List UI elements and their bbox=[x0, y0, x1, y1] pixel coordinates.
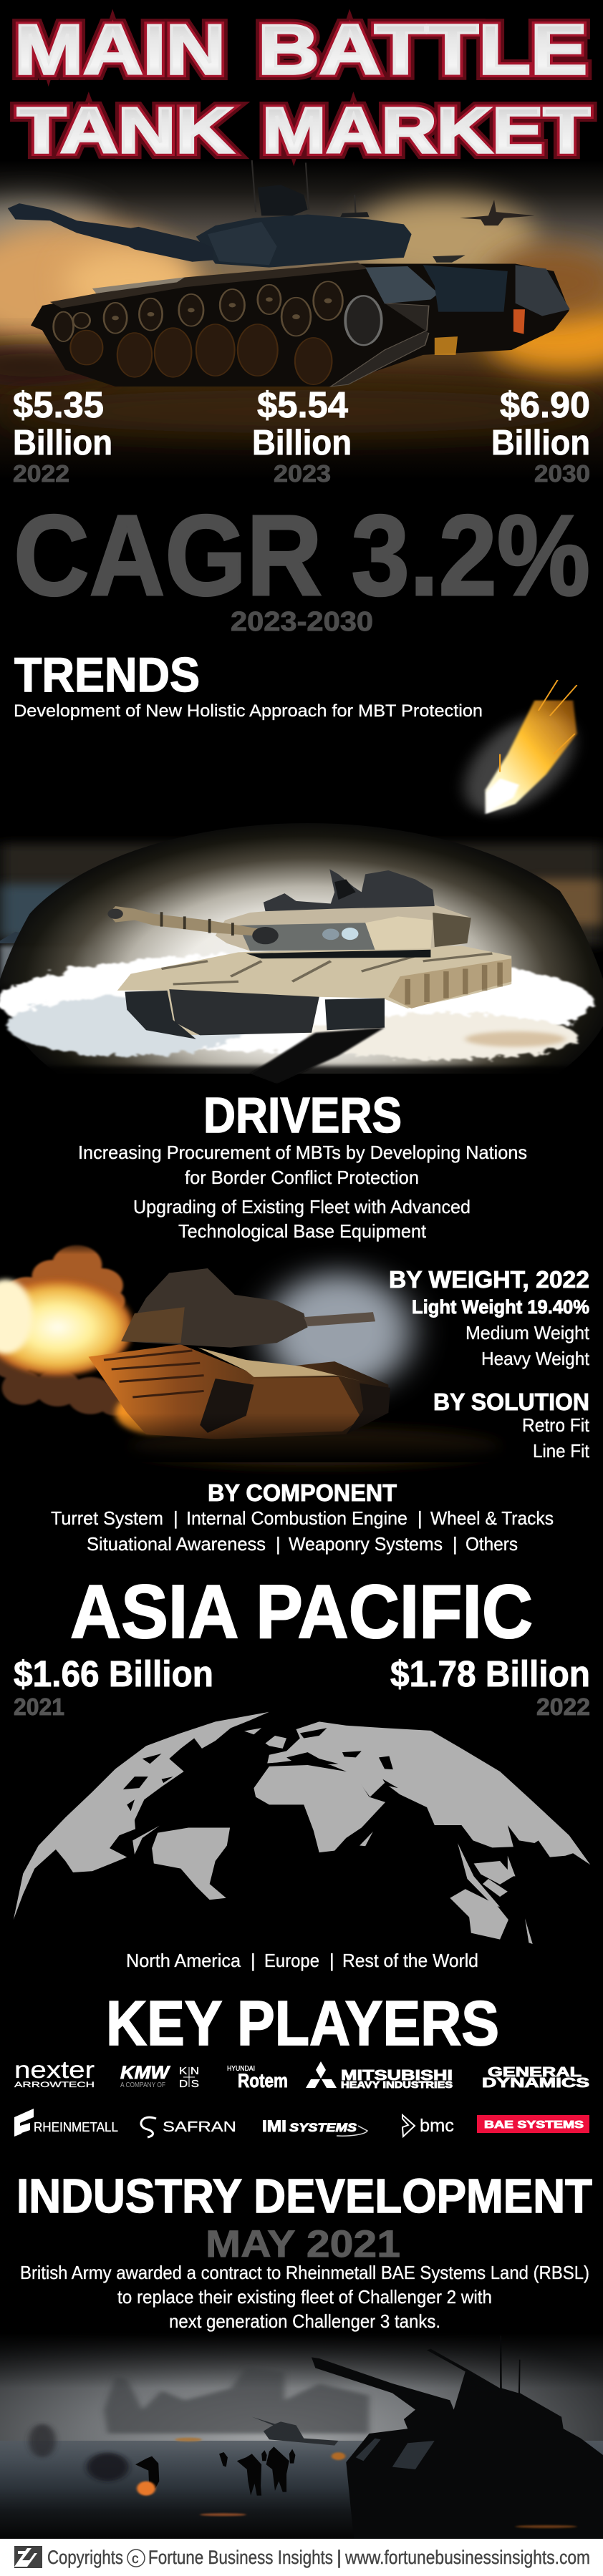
logo: nexter arrowtech: nexter bbox=[14, 2056, 95, 2083]
hull side ribbing bbox=[104, 1351, 204, 1397]
icon: incoming fireball bbox=[442, 680, 596, 825]
market size 2023: Billion bbox=[252, 424, 352, 462]
driver 2: Technological Base Equipment bbox=[178, 1220, 427, 1242]
barrel bbox=[108, 906, 271, 937]
logo: mitsubishi heavy industries: HEAVY INDUSTRIES bbox=[341, 2079, 453, 2090]
regional value 2021: 2021 bbox=[14, 1693, 64, 1720]
logo: kmw: KMW bbox=[120, 2063, 171, 2083]
dome glow bbox=[0, 823, 603, 1074]
tracks bbox=[200, 1379, 254, 1433]
by component: | bbox=[453, 1533, 458, 1555]
logo: imi systems: SYSTEMS bbox=[289, 2121, 357, 2134]
by component: | bbox=[276, 1533, 281, 1555]
soldiers bbox=[135, 2446, 295, 2496]
logo: rheinmetall bbox=[14, 2109, 118, 2137]
by weight: Light Weight 19.40% bbox=[412, 1296, 589, 1318]
regional value 2022: $1.78 Billion bbox=[390, 1653, 590, 1694]
lower wheels bbox=[70, 324, 332, 384]
copyright text: Fortune Business Insights bbox=[148, 2547, 333, 2568]
eurasia bbox=[267, 1721, 590, 1865]
hull bbox=[117, 946, 511, 1035]
sky fade bbox=[0, 2333, 603, 2388]
by weight: Medium Weight bbox=[465, 1322, 590, 1343]
uk bbox=[266, 1736, 286, 1749]
image: tank with explosion bbox=[0, 1239, 603, 1465]
CAGR period: 2023-2030 bbox=[231, 607, 373, 637]
regional value 2021: $1.66 Billion bbox=[14, 1653, 213, 1694]
market size 2022: Billion bbox=[13, 424, 112, 462]
title: MARKET bbox=[262, 95, 590, 167]
logo: general dynamics: DYNAMICS bbox=[482, 2076, 589, 2090]
logo: kmw: D S bbox=[179, 2078, 199, 2090]
background glow bbox=[266, 1273, 412, 1391]
distant tank bbox=[252, 2417, 339, 2446]
title: BATTLE bbox=[258, 10, 587, 89]
logo: kmw: A COMPANY OF bbox=[120, 2081, 165, 2089]
driver 1: for Border Conflict Protection bbox=[185, 1167, 419, 1188]
by component: | bbox=[418, 1507, 423, 1529]
logo: hyundai rotem: HYUNDAI bbox=[227, 2065, 255, 2073]
trends text: Development of New Holistic Approach for MBT Protection bbox=[14, 701, 483, 721]
logo: bmc: bmc bbox=[420, 2116, 454, 2136]
by solution: Retro Fit bbox=[522, 1414, 590, 1436]
smoke clouds bbox=[3, 1245, 125, 1316]
by component: Others bbox=[465, 1533, 518, 1555]
logo: safran: SAFRAN bbox=[163, 2119, 236, 2135]
driver 2 bbox=[133, 1196, 471, 1242]
title: BATTLE bbox=[258, 10, 587, 89]
roof gear bbox=[264, 869, 435, 911]
market size 2022: $5.35 bbox=[13, 384, 104, 425]
regional value 2022: 2022 bbox=[536, 1693, 590, 1720]
other regions: Europe bbox=[264, 1950, 319, 1971]
hero image: tank on burning battlefield bbox=[0, 160, 603, 480]
by component bbox=[51, 1479, 554, 1555]
logo: rheinmetall: RHEINMETALL bbox=[34, 2120, 118, 2134]
logo: general dynamics bbox=[482, 2065, 589, 2090]
copyright text: | bbox=[337, 2547, 342, 2568]
title: MAIN bbox=[14, 10, 226, 89]
market size 2023 bbox=[252, 384, 352, 487]
iceland bbox=[244, 1728, 261, 1734]
hull deck markings bbox=[162, 953, 492, 984]
market size 2022: 2022 bbox=[13, 460, 69, 487]
by component: Wheel & Tracks bbox=[430, 1507, 554, 1529]
copyright text bbox=[47, 2547, 590, 2568]
logo: hyundai rotem: Rotem bbox=[238, 2070, 288, 2091]
tracks bbox=[125, 991, 196, 1039]
other regions: Rest of the World bbox=[342, 1950, 478, 1971]
title: MAIN bbox=[14, 10, 226, 89]
logo: bae systems bbox=[477, 2115, 589, 2133]
north america and greenland bbox=[14, 1712, 269, 1920]
footer bar bbox=[0, 2539, 603, 2576]
image: tank in water under protective dome bbox=[0, 823, 603, 1140]
hull bbox=[89, 1344, 388, 1439]
madagascar bbox=[360, 1832, 373, 1846]
upper wheels bbox=[54, 281, 342, 341]
foreground tank bbox=[312, 2336, 603, 2539]
market size 2030: $6.90 bbox=[500, 384, 590, 425]
logo: kmw bbox=[120, 2063, 199, 2090]
turret bbox=[121, 1268, 308, 1348]
market size 2023: $5.54 bbox=[257, 384, 349, 425]
by solution: Line Fit bbox=[533, 1440, 590, 1462]
logo: bae systems: BAE SYSTEMS bbox=[484, 2119, 584, 2131]
fires bbox=[137, 2482, 155, 2496]
by component: Weaponry Systems bbox=[289, 1533, 443, 1555]
other regions bbox=[126, 1950, 478, 1971]
driver 1 bbox=[78, 1142, 527, 1188]
market size 2023: 2023 bbox=[274, 460, 331, 487]
by component: BY COMPONENT bbox=[208, 1479, 397, 1506]
vertical fade bbox=[0, 1239, 603, 1462]
logo: imi systems bbox=[262, 2117, 367, 2136]
africa bbox=[254, 1765, 385, 1852]
by weight bbox=[389, 1266, 590, 1369]
logo: bmc bbox=[402, 2115, 454, 2137]
key players heading: KEY PLAYERS bbox=[106, 1988, 499, 2059]
logo: kmw: K N bbox=[179, 2065, 199, 2077]
logo: imi systems: IMI bbox=[262, 2117, 286, 2135]
copyright text: c bbox=[132, 2552, 139, 2567]
central america and caribbean bbox=[132, 1826, 160, 1855]
outer scenery bbox=[0, 844, 603, 946]
title: TANK bbox=[17, 95, 233, 167]
market size 2030: Billion bbox=[491, 424, 590, 462]
fenders bbox=[365, 266, 438, 303]
regional value 2022 bbox=[390, 1653, 590, 1720]
title: MARKET bbox=[262, 95, 590, 167]
turret bbox=[216, 905, 471, 951]
development text: to replace their existing fleet of Challenger 2 with bbox=[117, 2286, 492, 2308]
logo: safran bbox=[141, 2117, 236, 2137]
by component: Situational Awareness bbox=[87, 1533, 266, 1555]
market size 2030: 2030 bbox=[534, 460, 590, 487]
driver 2: Upgrading of Existing Fleet with Advanced bbox=[133, 1196, 471, 1217]
logo: nexter arrowtech bbox=[14, 2056, 95, 2089]
copyright text: Copyrights bbox=[47, 2547, 123, 2568]
aircraft bbox=[460, 200, 534, 225]
track bbox=[331, 303, 429, 387]
fireball bbox=[0, 1279, 132, 1376]
drivers heading: DRIVERS bbox=[203, 1087, 402, 1143]
driver 1: Increasing Procurement of MBTs by Developing Nations bbox=[78, 1142, 527, 1163]
southeast asia islands bbox=[458, 1843, 516, 1907]
development text: next generation Challenger 3 tanks. bbox=[169, 2310, 440, 2332]
by component: Turret System bbox=[51, 1507, 163, 1529]
barrel bbox=[8, 203, 213, 262]
title: MARKET bbox=[262, 95, 590, 167]
by component: Internal Combustion Engine bbox=[186, 1507, 407, 1529]
drive sprocket bbox=[345, 296, 382, 345]
australia bbox=[450, 1889, 508, 1940]
regional heading: ASIA PACIFIC bbox=[70, 1570, 533, 1654]
other regions: North America bbox=[126, 1950, 241, 1971]
by solution: BY SOLUTION bbox=[433, 1389, 589, 1415]
by weight: BY WEIGHT, 2022 bbox=[389, 1266, 589, 1293]
trends heading: TRENDS bbox=[14, 648, 200, 702]
world map globe bbox=[14, 1712, 590, 1944]
by component: | bbox=[173, 1507, 178, 1529]
cupola and antennae bbox=[258, 185, 308, 215]
market size 2030 bbox=[491, 384, 590, 487]
title: MAIN bbox=[14, 10, 226, 89]
hull front bbox=[169, 989, 319, 1035]
development date: MAY 2021 bbox=[206, 2223, 400, 2265]
logo: hyundai rotem bbox=[227, 2065, 288, 2091]
ruins bbox=[104, 2367, 370, 2434]
turret bbox=[196, 215, 412, 268]
market size 2022 bbox=[13, 384, 112, 487]
new zealand bbox=[525, 1918, 533, 1944]
logo: mitsubishi heavy industries bbox=[306, 2061, 453, 2090]
by solution bbox=[433, 1389, 590, 1462]
title bbox=[14, 10, 590, 167]
title: BATTLE bbox=[258, 10, 587, 89]
dark ground bbox=[0, 2441, 603, 2539]
logo: nexter arrowtech: ARROWTECH bbox=[14, 2081, 95, 2089]
logo: general dynamics: GENERAL bbox=[488, 2065, 582, 2079]
logo: mitsubishi heavy industries: MITSUBISHI bbox=[341, 2068, 453, 2084]
title: TANK bbox=[17, 95, 233, 167]
regional value 2021 bbox=[14, 1653, 213, 1720]
by weight: Heavy Weight bbox=[481, 1348, 590, 1369]
other regions: | bbox=[251, 1950, 256, 1971]
tank hull bbox=[31, 264, 569, 387]
south america bbox=[152, 1828, 230, 1900]
battlefield image bbox=[0, 2333, 603, 2539]
title: TANK bbox=[17, 95, 233, 167]
development text bbox=[20, 2262, 589, 2332]
other regions: | bbox=[329, 1950, 334, 1971]
icon: fortune business insights logo bbox=[14, 2546, 42, 2568]
water splash bbox=[0, 952, 594, 1052]
